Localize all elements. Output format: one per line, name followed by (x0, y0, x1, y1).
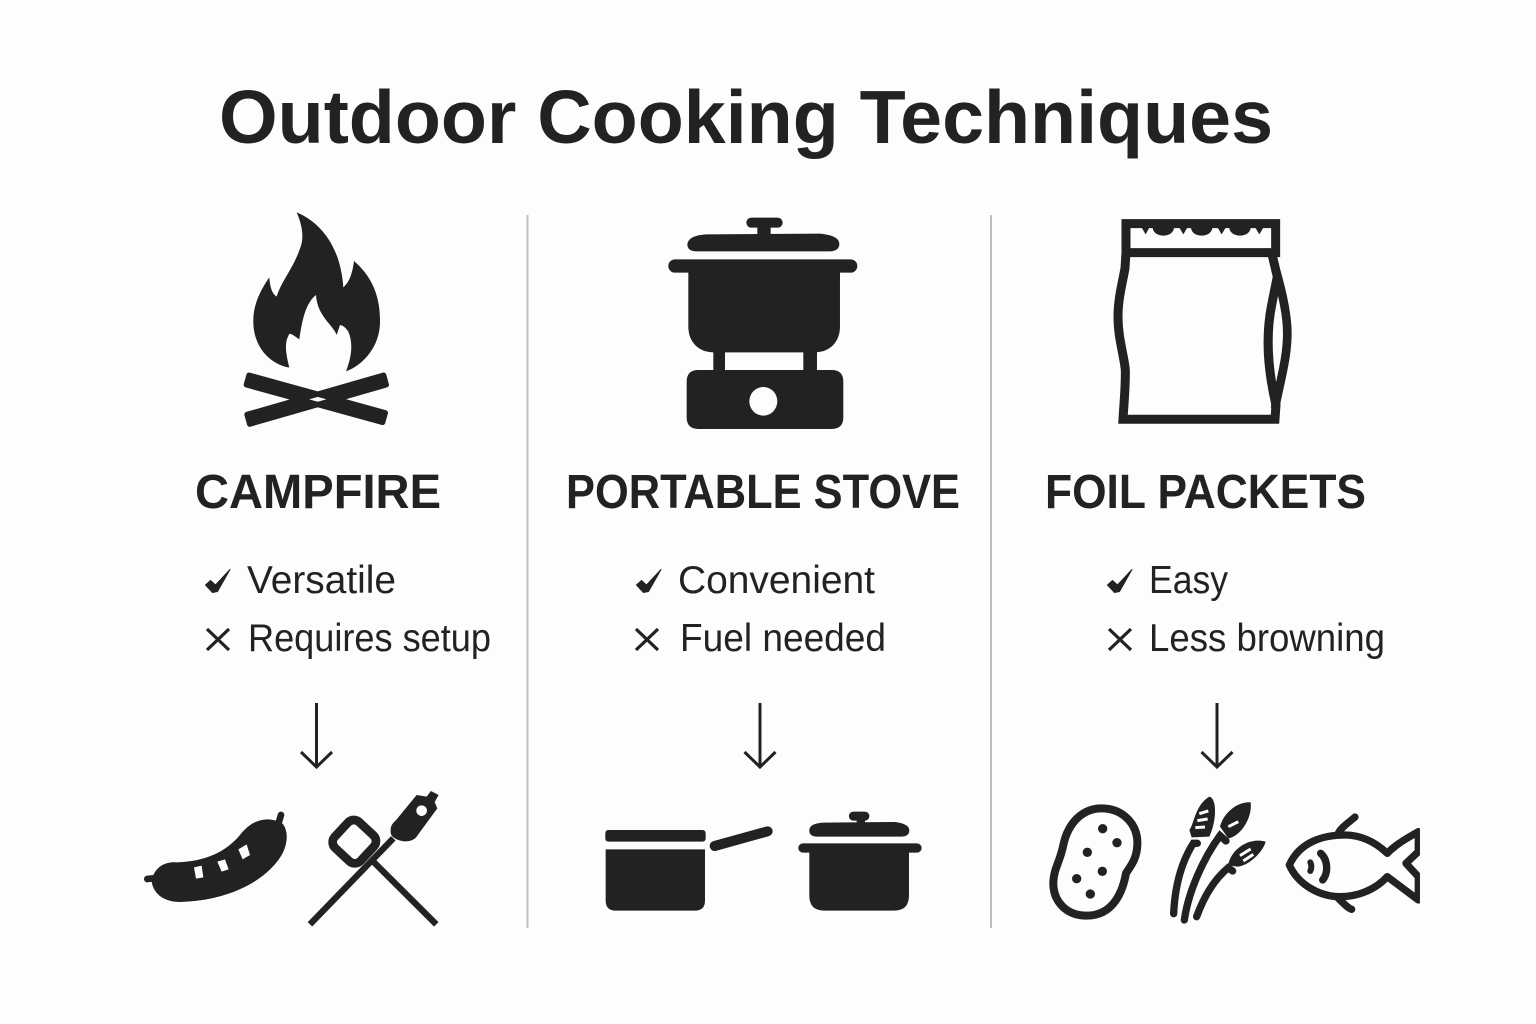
text: con: Less browning (1149, 617, 1385, 660)
text: con: Fuel needed (680, 617, 886, 660)
heading: portable stove: PORTABLE STOVE (566, 466, 960, 519)
icon: check (206, 570, 230, 592)
arrow (744, 703, 776, 767)
icon: cross (636, 629, 658, 650)
icon: campfire (246, 212, 386, 424)
icon: cross (207, 629, 229, 650)
icon: lidded pot (798, 812, 922, 911)
icon: sausage (147, 815, 287, 902)
icon: pot on stove (668, 218, 857, 429)
panel: campfire (147, 212, 491, 924)
icon: fish (1289, 817, 1418, 909)
panel: portable stove (566, 218, 960, 911)
arrow (1202, 703, 1232, 767)
heading: foil packets: FOIL PACKETS (1045, 466, 1366, 519)
icon: potato (1053, 808, 1137, 916)
icon: check (1108, 570, 1132, 592)
text: pro: Convenient (678, 559, 875, 602)
panel: foil packets (1045, 224, 1418, 920)
icon: check (636, 570, 661, 592)
text: pro: Easy (1149, 559, 1228, 602)
text: pro: Versatile (247, 559, 396, 602)
title: Outdoor Cooking Techniques (219, 75, 1273, 159)
text: con: Requires setup (248, 617, 491, 660)
icon: cross (1109, 629, 1131, 650)
icon: foil packet (1118, 224, 1287, 419)
arrow (301, 703, 332, 767)
icon: roasting skewers (310, 791, 439, 924)
icon: saucepan (605, 830, 768, 911)
heading: campfire: CAMPFIRE (195, 466, 441, 519)
icon: asparagus (1174, 797, 1266, 920)
